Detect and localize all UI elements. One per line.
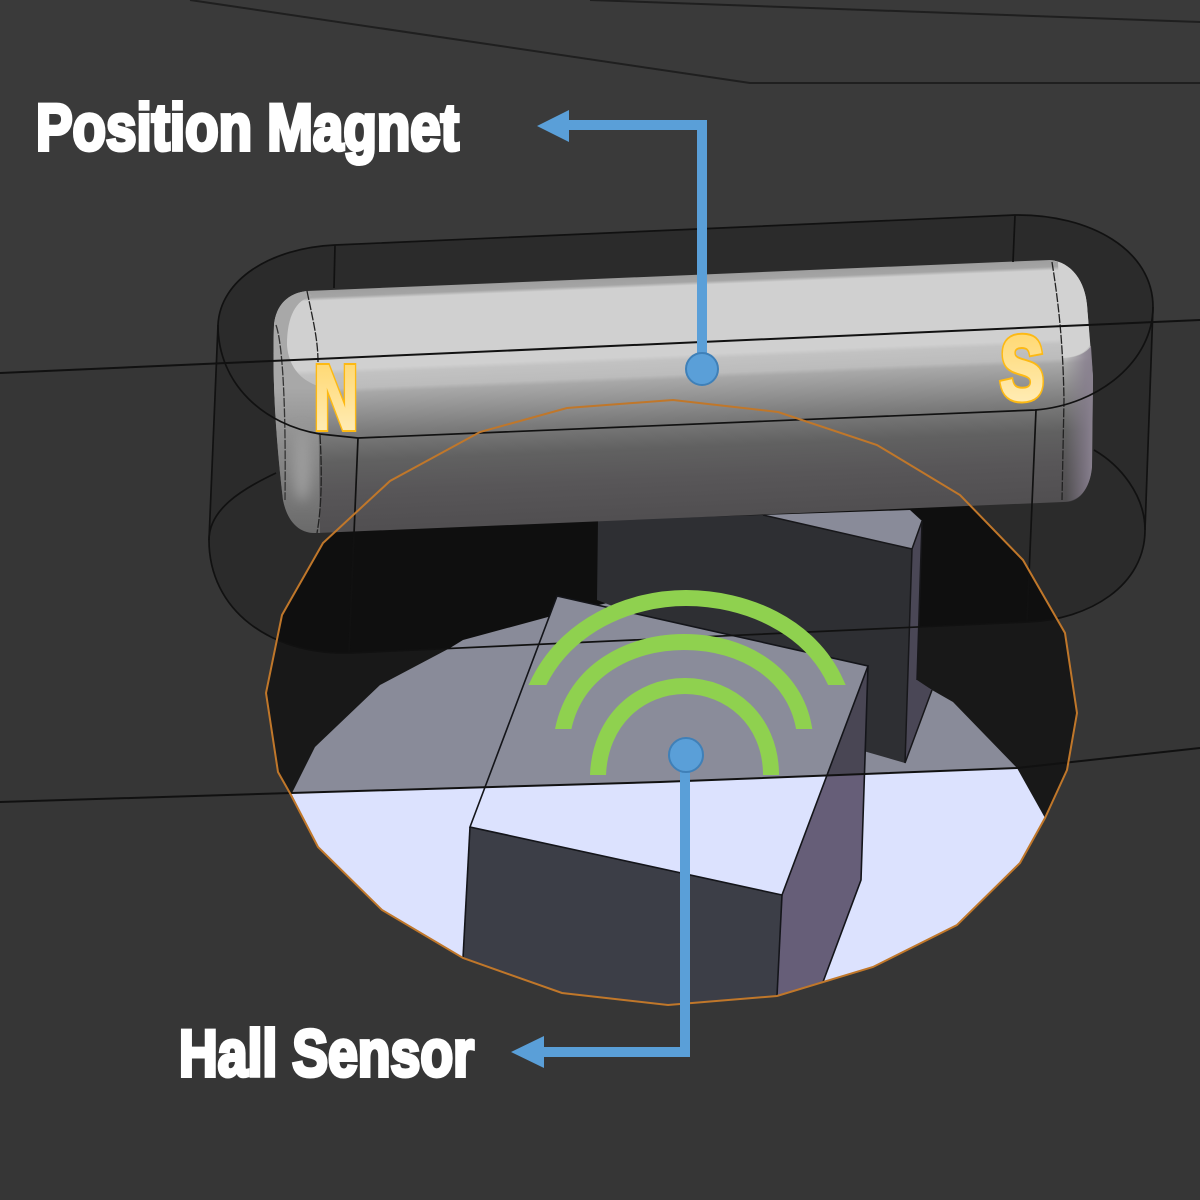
orange circle outline	[266, 400, 1077, 1005]
label: hall sensor: Hall Sensor	[179, 1016, 474, 1090]
hall sensor block	[463, 596, 868, 1005]
rear sensor block	[597, 510, 932, 763]
callout arrow: position magnet	[537, 110, 718, 385]
south pole label: S	[1000, 319, 1044, 419]
position magnet body	[273, 260, 1093, 533]
floor: shadowed and lit areas	[291, 600, 1045, 1005]
north pole label: N	[314, 348, 358, 448]
magnet housing capsule	[209, 215, 1153, 653]
housing wireframe outline	[0, 215, 1200, 802]
south pole label: S	[1000, 319, 1044, 419]
north pole label	[314, 348, 358, 448]
label: position magnet: Position Magnet	[36, 90, 459, 164]
north pole label: N	[314, 348, 358, 448]
sensor cavity circle	[267, 506, 1076, 817]
magnetic field arcs	[526, 598, 846, 795]
callout arrow: hall sensor	[511, 738, 703, 1068]
